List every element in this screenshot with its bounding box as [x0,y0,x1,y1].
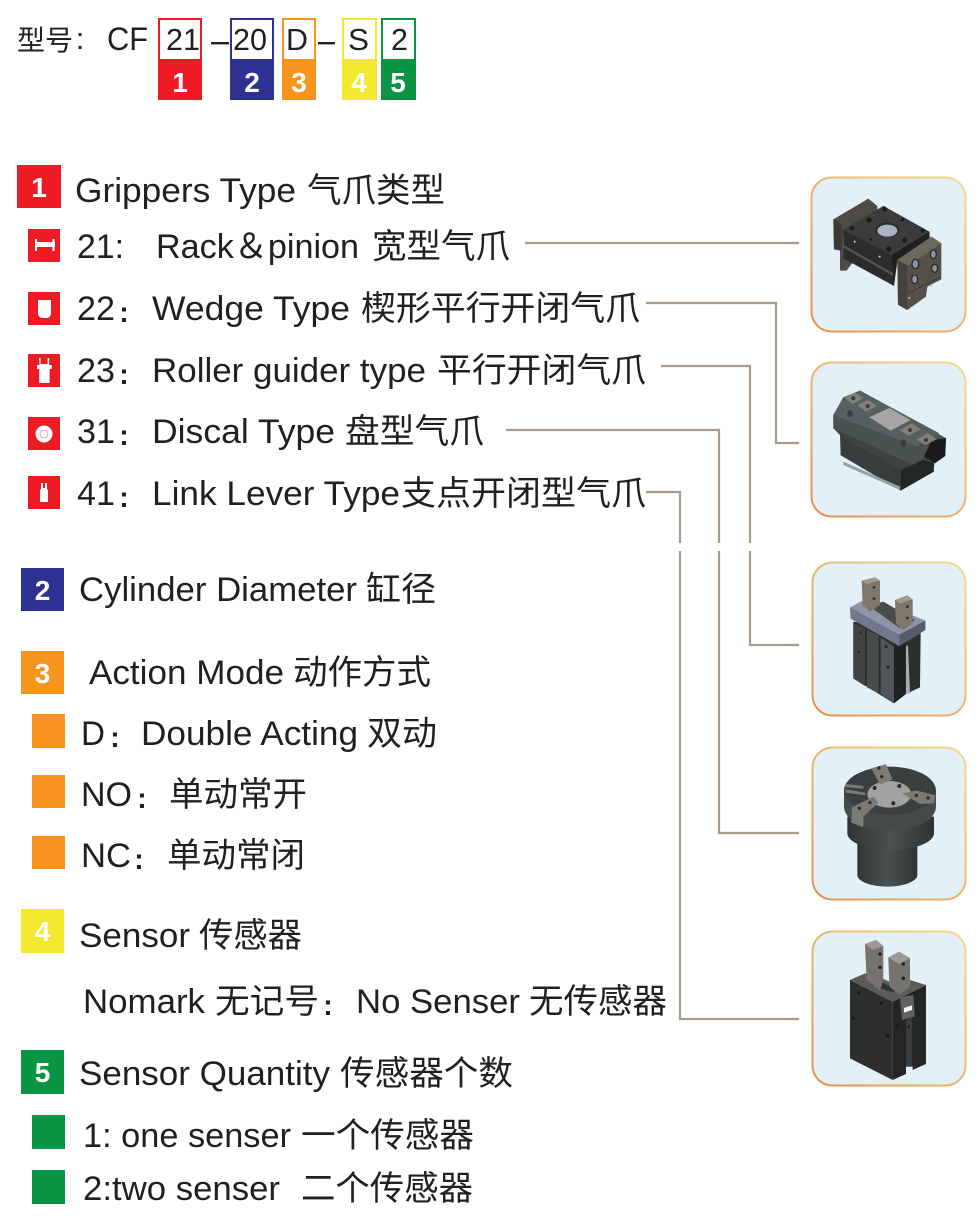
code box 3: D [286,22,308,57]
code box 1 [158,18,202,100]
code box 2: 2 [244,67,260,98]
panel: wedge gripper [812,362,966,516]
option D: D [81,715,105,753]
option NO: : [137,783,147,815]
sensor option: no mark: Nomark [83,983,206,1021]
option NC: : [134,844,144,876]
item 41: : [119,482,129,514]
section 4 heading: sensor: 4 [35,916,51,947]
section 2 heading: cylinder diameter: 2 [35,575,50,606]
code box 4: S [348,22,369,57]
option one sensor: 一个传感器 [301,1117,474,1155]
section 4 heading: sensor [21,909,302,955]
item 23: : [119,359,129,391]
option NC [32,836,305,876]
code box 5: 2 [391,22,408,57]
sensor option: no mark [83,983,667,1022]
section 3 heading: action mode: Action Mode [89,654,284,692]
code box 2: 20 [233,22,267,57]
item 21: 宽型气爪 [372,228,510,266]
item 23 [28,352,646,391]
item 23: 平行开闭气爪 [437,352,646,390]
code box 1: 1 [172,67,188,98]
section 5 heading: sensor quantity: Sensor Quantity [79,1055,330,1093]
code box 5 [381,18,416,100]
model label: : [76,21,84,56]
section 5 heading: sensor quantity: 传感器个数 [340,1055,513,1093]
code box 2 [230,18,274,100]
item 31: : [119,420,129,452]
product: wedge gripper [833,391,946,491]
model label [17,21,148,57]
section 5 heading: sensor quantity [21,1050,513,1094]
code box 3: 3 [291,67,307,98]
code box 4: 4 [351,67,367,98]
item 21 [28,228,510,266]
item 31: 盘型气爪 [345,413,484,451]
item 31: Discal Type [152,413,335,451]
section 1 heading: grippers type: Grippers Type [75,172,296,210]
section 4 heading: sensor: 传感器 [199,917,302,955]
product: roller guider gripper [850,577,925,703]
option two sensors: 2:two senser [83,1170,280,1208]
panel: roller guider gripper [812,562,966,716]
option NO: 单动常开 [169,776,307,814]
product: rack and pinion gripper [833,199,941,310]
item 23: Roller guider type [152,352,426,390]
item 41: 41 [77,475,115,513]
option two sensors: 二个传感器 [301,1170,473,1208]
panel: discal gripper [812,748,966,900]
code box 5: 5 [390,67,406,98]
item 22: 楔形平行开闭气爪 [361,290,640,328]
panel: link lever gripper [812,932,966,1086]
option one sensor: 1: one senser [83,1117,291,1155]
sensor option: no mark: 无记号 [215,983,319,1021]
section 2 heading: cylinder diameter: Cylinder Diameter [79,571,357,609]
model label: 型号 [17,25,73,56]
item 22: : [119,297,129,329]
option D: : [110,722,120,754]
panel: rack and pinion gripper [812,178,966,332]
sensor option: no mark: : [323,990,333,1022]
item 31 [28,413,484,452]
option D: 双动 [367,715,437,753]
sensor option: no mark: No Senser [356,983,520,1021]
code box 4 [342,18,377,100]
connector lines [506,243,799,1019]
code box 1: 21 [166,22,200,57]
section 4 heading: sensor: Sensor [79,917,190,955]
code box 3 [282,18,316,100]
option NC: 单动常闭 [167,837,305,875]
option NC: NC [81,837,131,875]
dash [211,42,229,44]
section 2 heading: cylinder diameter [21,568,436,611]
item 41: Link Lever Type [152,475,400,513]
item 23: 23 [77,352,115,390]
item 22: Wedge Type [152,290,350,328]
section 5 heading: sensor quantity: 5 [35,1057,50,1088]
model label: CF [107,21,148,57]
option D [32,714,437,754]
sensor option: no mark: 无传感器 [529,983,667,1021]
option one sensor [32,1115,474,1155]
item 22: 22 [77,290,115,328]
product: link lever gripper [850,940,926,1080]
dash [318,42,335,44]
section 1 heading: grippers type: 气爪类型 [307,172,445,210]
option two sensors [32,1170,473,1208]
option NO [32,775,307,815]
item 41 [28,475,646,514]
section 3 heading: action mode: 3 [35,658,50,689]
item 41: 支点开闭型气爪 [401,475,646,513]
item 21: 21: [77,228,124,266]
item 21: Rack＆pinion [156,228,359,266]
option D: Double Acting [141,715,358,753]
model code header [17,18,416,100]
item 31: 31 [77,413,115,451]
section 3 heading: action mode [21,651,431,694]
item 22 [28,290,640,329]
section 1 heading: grippers type: 1 [31,172,47,203]
product: discal gripper [844,764,936,887]
section 2 heading: cylinder diameter: 缸径 [366,571,436,609]
section 3 heading: action mode: 动作方式 [293,654,431,692]
option NO: NO [81,776,132,814]
section 1 heading: grippers type [17,165,445,210]
